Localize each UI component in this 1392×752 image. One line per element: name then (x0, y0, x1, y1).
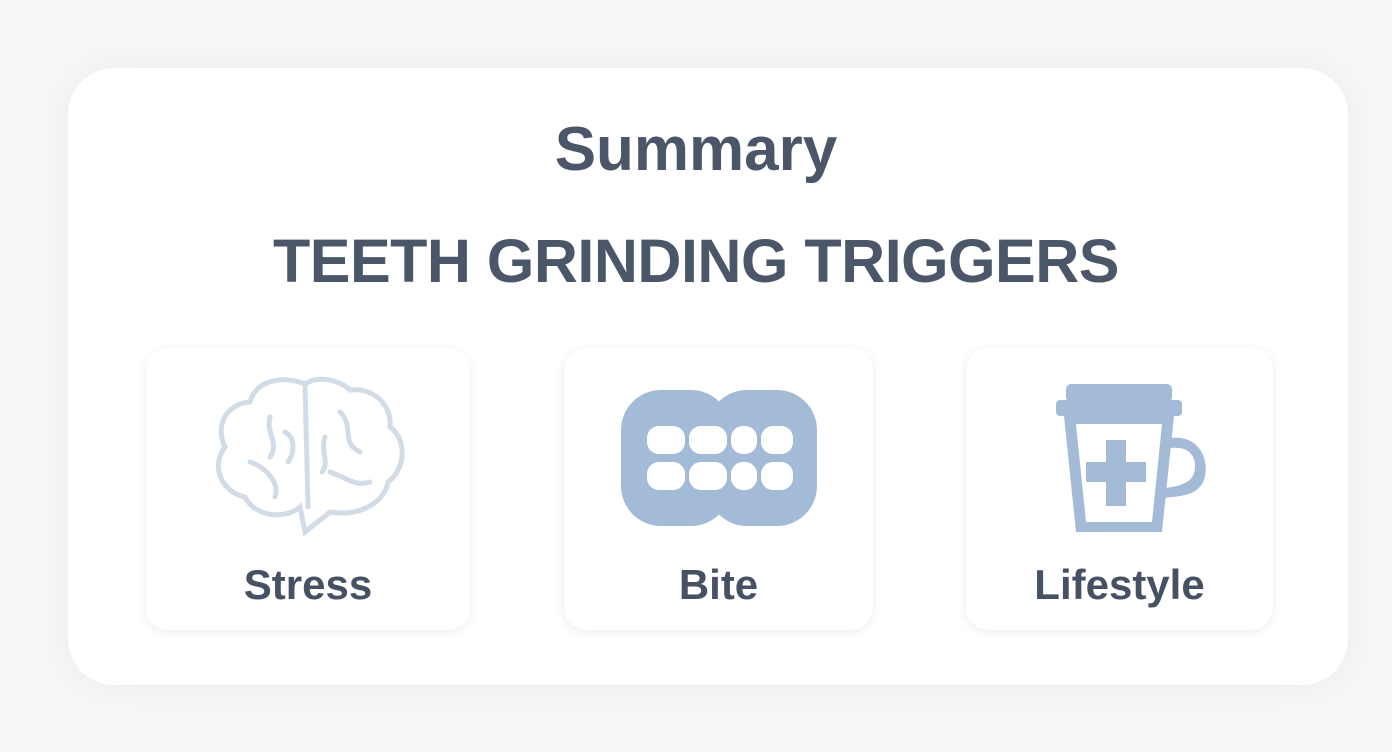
icon: cup (1056, 384, 1206, 532)
label: Stress (244, 561, 372, 608)
title: TEETH GRINDING TRIGGERS (273, 227, 1119, 295)
heading: summary: Summary (555, 115, 837, 184)
panel: lifestyle (966, 348, 1273, 630)
main panel (68, 68, 1348, 685)
label: Bite (679, 561, 758, 608)
icon: brain (216, 376, 405, 536)
icon: teeth (621, 390, 817, 526)
panel: bite (564, 348, 873, 630)
label: Lifestyle (1034, 561, 1205, 608)
panel: stress (146, 348, 470, 630)
